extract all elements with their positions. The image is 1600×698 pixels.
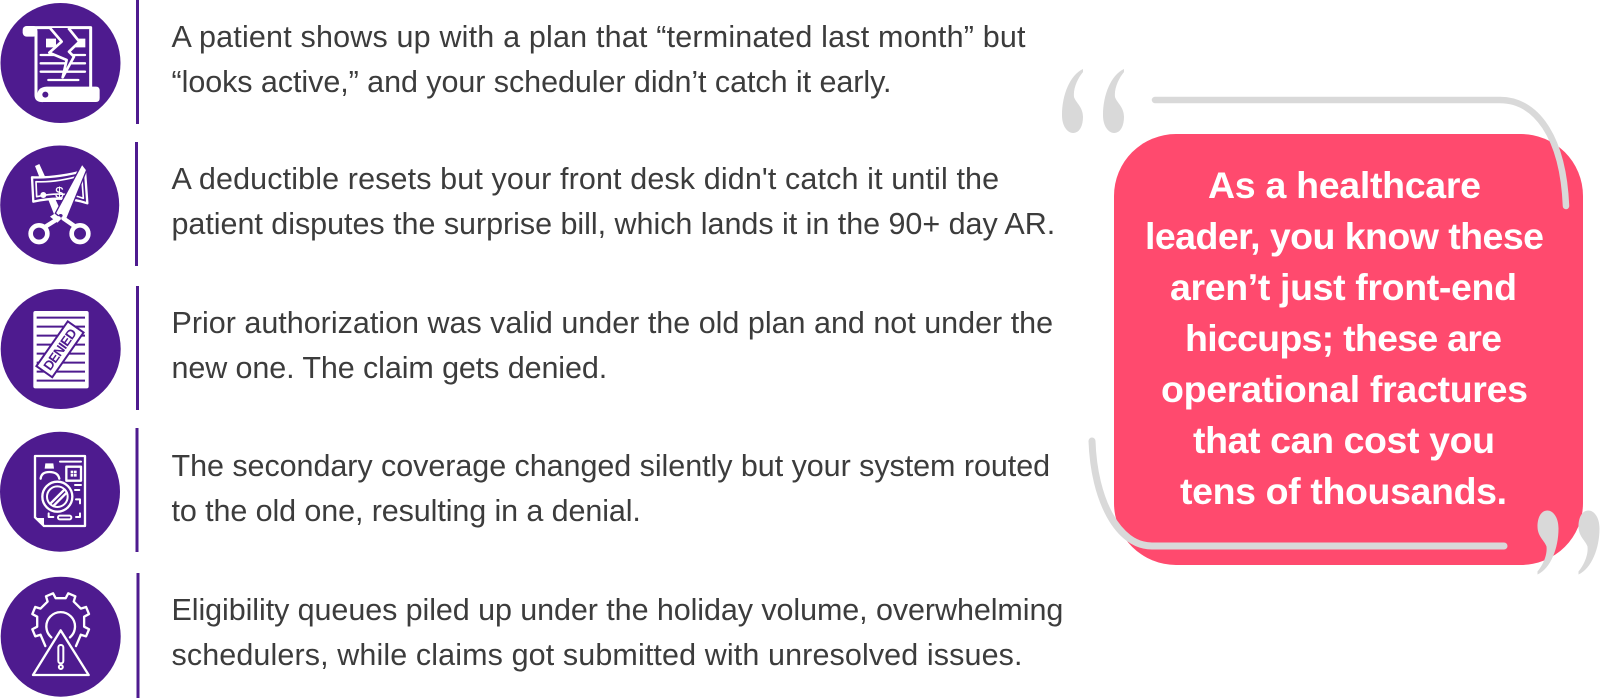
- callout text: tens of thousands.: [1180, 470, 1507, 512]
- divider line: [135, 142, 138, 266]
- callout text: hiccups; these are: [1185, 317, 1502, 359]
- divider line: [136, 573, 140, 698]
- row 2: deductible reset: [0, 142, 1055, 266]
- text: deductible reset: A deductible resets but your front desk didn't catch it until the: [172, 162, 999, 196]
- icon: blocked coverage card: [0, 432, 120, 552]
- text: prior authorization: new one. The claim gets denied.: [172, 351, 607, 385]
- callout text: that can cost you: [1193, 419, 1495, 461]
- text: deductible reset: patient disputes the surprise bill, which lands it in the 90+ day AR.: [172, 207, 1055, 241]
- row 5: eligibility queues: [1, 573, 1063, 698]
- icon: gear with warning triangle: [1, 577, 121, 697]
- row 1: terminated plan: [0, 0, 1026, 124]
- panel: pink rounded box: [1114, 134, 1583, 565]
- text: prior authorization: Prior authorization was valid under the old plan and not under the: [172, 306, 1053, 340]
- divider line: [136, 428, 138, 552]
- row 4: secondary coverage: [0, 428, 1050, 552]
- callout text: operational fractures: [1161, 368, 1528, 410]
- icon: scissors cutting money: $: [55, 185, 64, 202]
- text: terminated plan: “looks active,” and your scheduler didn’t catch it early.: [172, 65, 892, 99]
- icon: closing quote marks: [1538, 510, 1600, 574]
- icon: torn scroll: [0, 3, 120, 123]
- text: eligibility queues: Eligibility queues piled up under the holiday volume, overwhelming: [172, 593, 1063, 627]
- icon: denied document: [1, 289, 121, 409]
- callout text: aren’t just front-end: [1170, 266, 1517, 308]
- text: secondary coverage: to the old one, resulting in a denial.: [172, 494, 641, 528]
- text: eligibility queues: schedulers, while claims got submitted with unresolved issues.: [172, 638, 1022, 672]
- callout text: As a healthcare: [1208, 164, 1481, 206]
- icon: opening quote marks: [1062, 69, 1124, 133]
- divider line: [136, 286, 139, 410]
- bracket: top right curve: [1155, 100, 1566, 206]
- divider line: [136, 0, 139, 124]
- callout text: leader, you know these: [1145, 215, 1544, 257]
- text: secondary coverage: The secondary coverage changed silently but your system routed: [172, 449, 1050, 483]
- bracket: bottom left curve: [1092, 441, 1504, 546]
- row 3: prior authorization: [1, 286, 1053, 410]
- icon: scissors cutting money: [0, 146, 119, 264]
- text: terminated plan: A patient shows up with a plan that “terminated last month” but: [172, 20, 1026, 54]
- callout: pink quote panel: [1062, 69, 1600, 574]
- icon: denied document: DENIED: [40, 325, 80, 373]
